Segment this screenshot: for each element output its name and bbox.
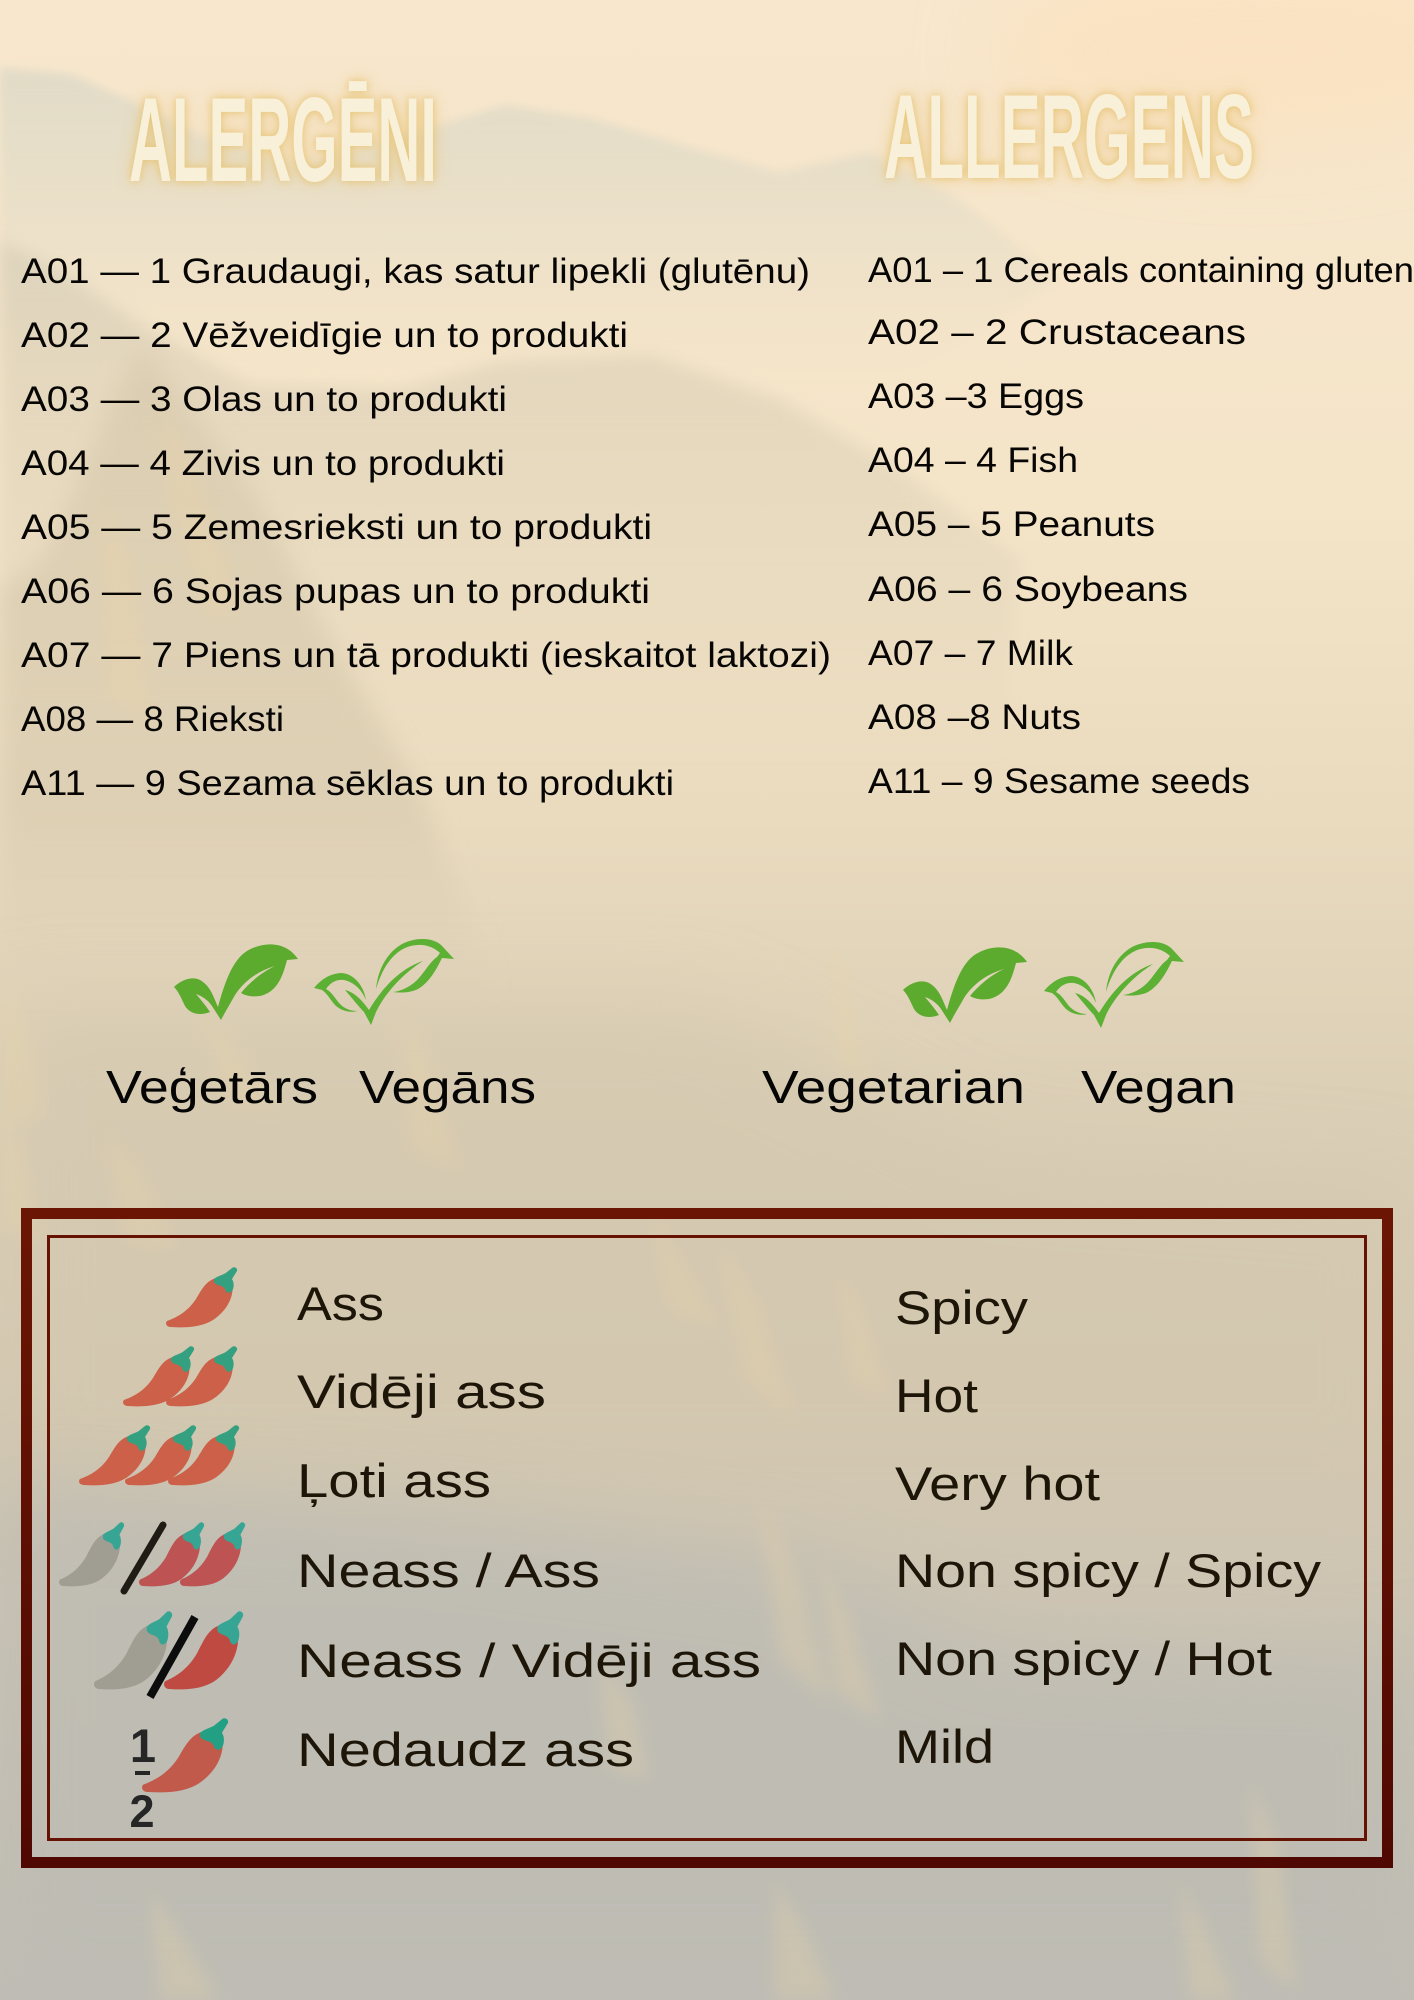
text block: Latvian allergen list: A05 — 5 Zemesrieksti un to produkti bbox=[21, 508, 652, 547]
text block: Latvian allergen list: A04 — 4 Zivis un to produkti bbox=[21, 444, 505, 483]
text block: Latvian allergen list: A03 — 3 Olas un to produkti bbox=[21, 380, 507, 419]
text block: Latvian allergen list: A06 — 6 Sojas pupas un to produkti bbox=[21, 572, 650, 611]
icon: half chili: 2 bbox=[129, 1786, 155, 1837]
text block: Latvian allergen list bbox=[21, 252, 831, 803]
text block: English allergen list: A02 – 2 Crustaceans bbox=[868, 313, 1246, 352]
infographic canvas: ALERGĒNI bbox=[129, 73, 437, 207]
label: Vegetarian: Vegetarian bbox=[762, 1061, 1025, 1113]
text block: English spiciness labels: Very hot bbox=[895, 1457, 1100, 1510]
icon: vegetarian leaf check (left) bbox=[174, 944, 298, 1020]
outer frame bbox=[26, 1214, 1388, 1862]
text block: Latvian spiciness labels: Neass / Ass bbox=[297, 1544, 600, 1597]
icon: vegetarian leaf check (right) bbox=[903, 947, 1027, 1023]
text block: English spiciness labels bbox=[895, 1281, 1322, 1773]
text block: Latvian spiciness labels bbox=[297, 1277, 761, 1776]
text block: English spiciness labels: Non spicy / Hot bbox=[895, 1632, 1272, 1685]
text block: English allergen list: A11 – 9 Sesame seeds bbox=[868, 762, 1250, 801]
text block: Latvian spiciness labels: Vidēji ass bbox=[297, 1365, 546, 1418]
icon: vegan outline leaf check (right) bbox=[1044, 942, 1184, 1028]
text block: English spiciness labels: Mild bbox=[895, 1720, 994, 1773]
text block: English allergen list: A07 – 7 Milk bbox=[868, 634, 1074, 673]
text block: English allergen list: A08 –8 Nuts bbox=[868, 698, 1081, 737]
icon: half chili: 1 bbox=[130, 1719, 156, 1772]
icon: half chili bbox=[129, 1718, 228, 1837]
text block: English allergen list: A04 – 4 Fish bbox=[868, 441, 1078, 480]
text block: English allergen list: A03 –3 Eggs bbox=[868, 377, 1084, 416]
inner frame bbox=[48, 1236, 1366, 1840]
panel: spiciness legend bbox=[26, 1214, 1388, 1862]
text block: English allergen list: A01 – 1 Cereals containing gluten bbox=[868, 251, 1414, 290]
text block: Latvian allergen list: A01 — 1 Graudaugi, kas satur lipekli (glutēnu) bbox=[21, 252, 810, 291]
text block: English spiciness labels: Spicy bbox=[895, 1281, 1029, 1334]
text block: Latvian allergen list: A02 — 2 Vēžveidīgie un to produkti bbox=[21, 316, 628, 355]
text block: Latvian allergen list: A11 — 9 Sezama sēklas un to produkti bbox=[21, 764, 674, 803]
text block: Latvian spiciness labels: Nedaudz ass bbox=[297, 1723, 634, 1776]
label: Vegāns: Vegāns bbox=[359, 1061, 536, 1113]
text block: Latvian spiciness labels: Ļoti ass bbox=[297, 1454, 491, 1507]
label: Vegan: Vegan bbox=[1081, 1061, 1236, 1113]
text block: English allergen list: A05 – 5 Peanuts bbox=[868, 505, 1155, 544]
icon: vegan outline leaf check (left) bbox=[314, 939, 454, 1025]
text block: English spiciness labels: Hot bbox=[895, 1369, 978, 1422]
icon: non spicy / hot chilies bbox=[94, 1611, 243, 1697]
text block: English spiciness labels: Non spicy / Spicy bbox=[895, 1544, 1322, 1597]
text block: English allergen list bbox=[868, 251, 1414, 801]
text block: English allergen list: A06 – 6 Soybeans bbox=[868, 570, 1188, 609]
icon: two chilies bbox=[123, 1346, 237, 1406]
text block: Latvian spiciness labels: Ass bbox=[297, 1277, 384, 1330]
icon: non spicy / spicy chilies bbox=[59, 1522, 245, 1591]
text block: Latvian allergen list: A07 — 7 Piens un tā produkti (ieskaitot laktozi) bbox=[21, 636, 831, 675]
label: Veģetārs: Veģetārs bbox=[106, 1061, 318, 1113]
text block: Latvian spiciness labels: Neass / Vidēji ass bbox=[297, 1634, 761, 1687]
icon: three chilies bbox=[79, 1425, 239, 1485]
text block: Latvian allergen list: A08 — 8 Rieksti bbox=[21, 700, 284, 739]
icon: one chili bbox=[166, 1267, 237, 1327]
